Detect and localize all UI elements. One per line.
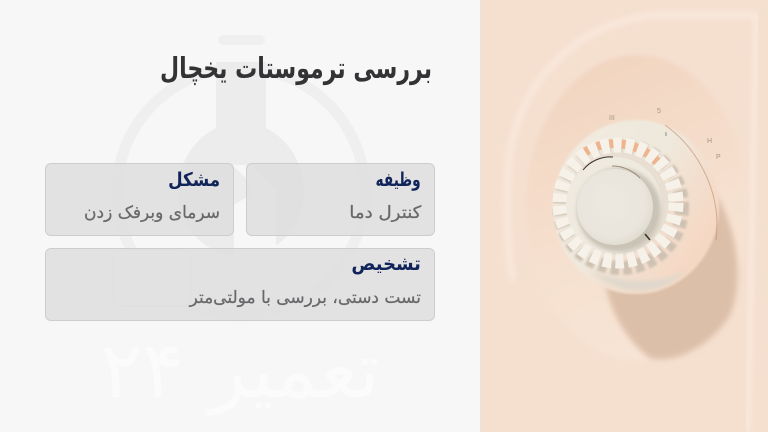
scale marks: [609, 108, 721, 161]
card text: diagnosis: تست دستی، بررسی با مولتی‌متر: [190, 288, 421, 308]
card: problem: [45, 163, 234, 236]
raised panel edge: [507, 15, 756, 280]
card: function: [246, 163, 435, 236]
card heading: function: وظیفه: [376, 169, 421, 191]
dial base disc: [553, 120, 719, 294]
scale marks: H: [707, 138, 712, 145]
card text: problem: سرمای وبرفک زدن: [84, 203, 220, 223]
recessed dish: [526, 55, 748, 361]
photo: thermostat dial: [480, 0, 768, 432]
panel: left background: [0, 0, 480, 432]
photo background: [480, 0, 768, 432]
card heading: diagnosis: تشخیص: [352, 253, 421, 275]
card text: function: کنترل دما: [349, 203, 421, 223]
watermark logo: [184, 62, 298, 248]
card heading: problem: مشکل: [168, 169, 220, 191]
title: بررسی ترموستات یخچال: [160, 51, 432, 85]
gear knob: [560, 144, 682, 268]
scale marks: III: [609, 115, 615, 122]
card: diagnosis: [45, 248, 435, 321]
scale marks: ı: [665, 131, 667, 138]
scale marks: P: [716, 154, 721, 161]
dial markings: [583, 157, 650, 240]
watermark wordmark: تعمیر ۲۴: [100, 326, 380, 416]
knob cap: [577, 169, 653, 245]
dial shadow: [605, 195, 738, 359]
scale marks: 5: [657, 108, 661, 115]
